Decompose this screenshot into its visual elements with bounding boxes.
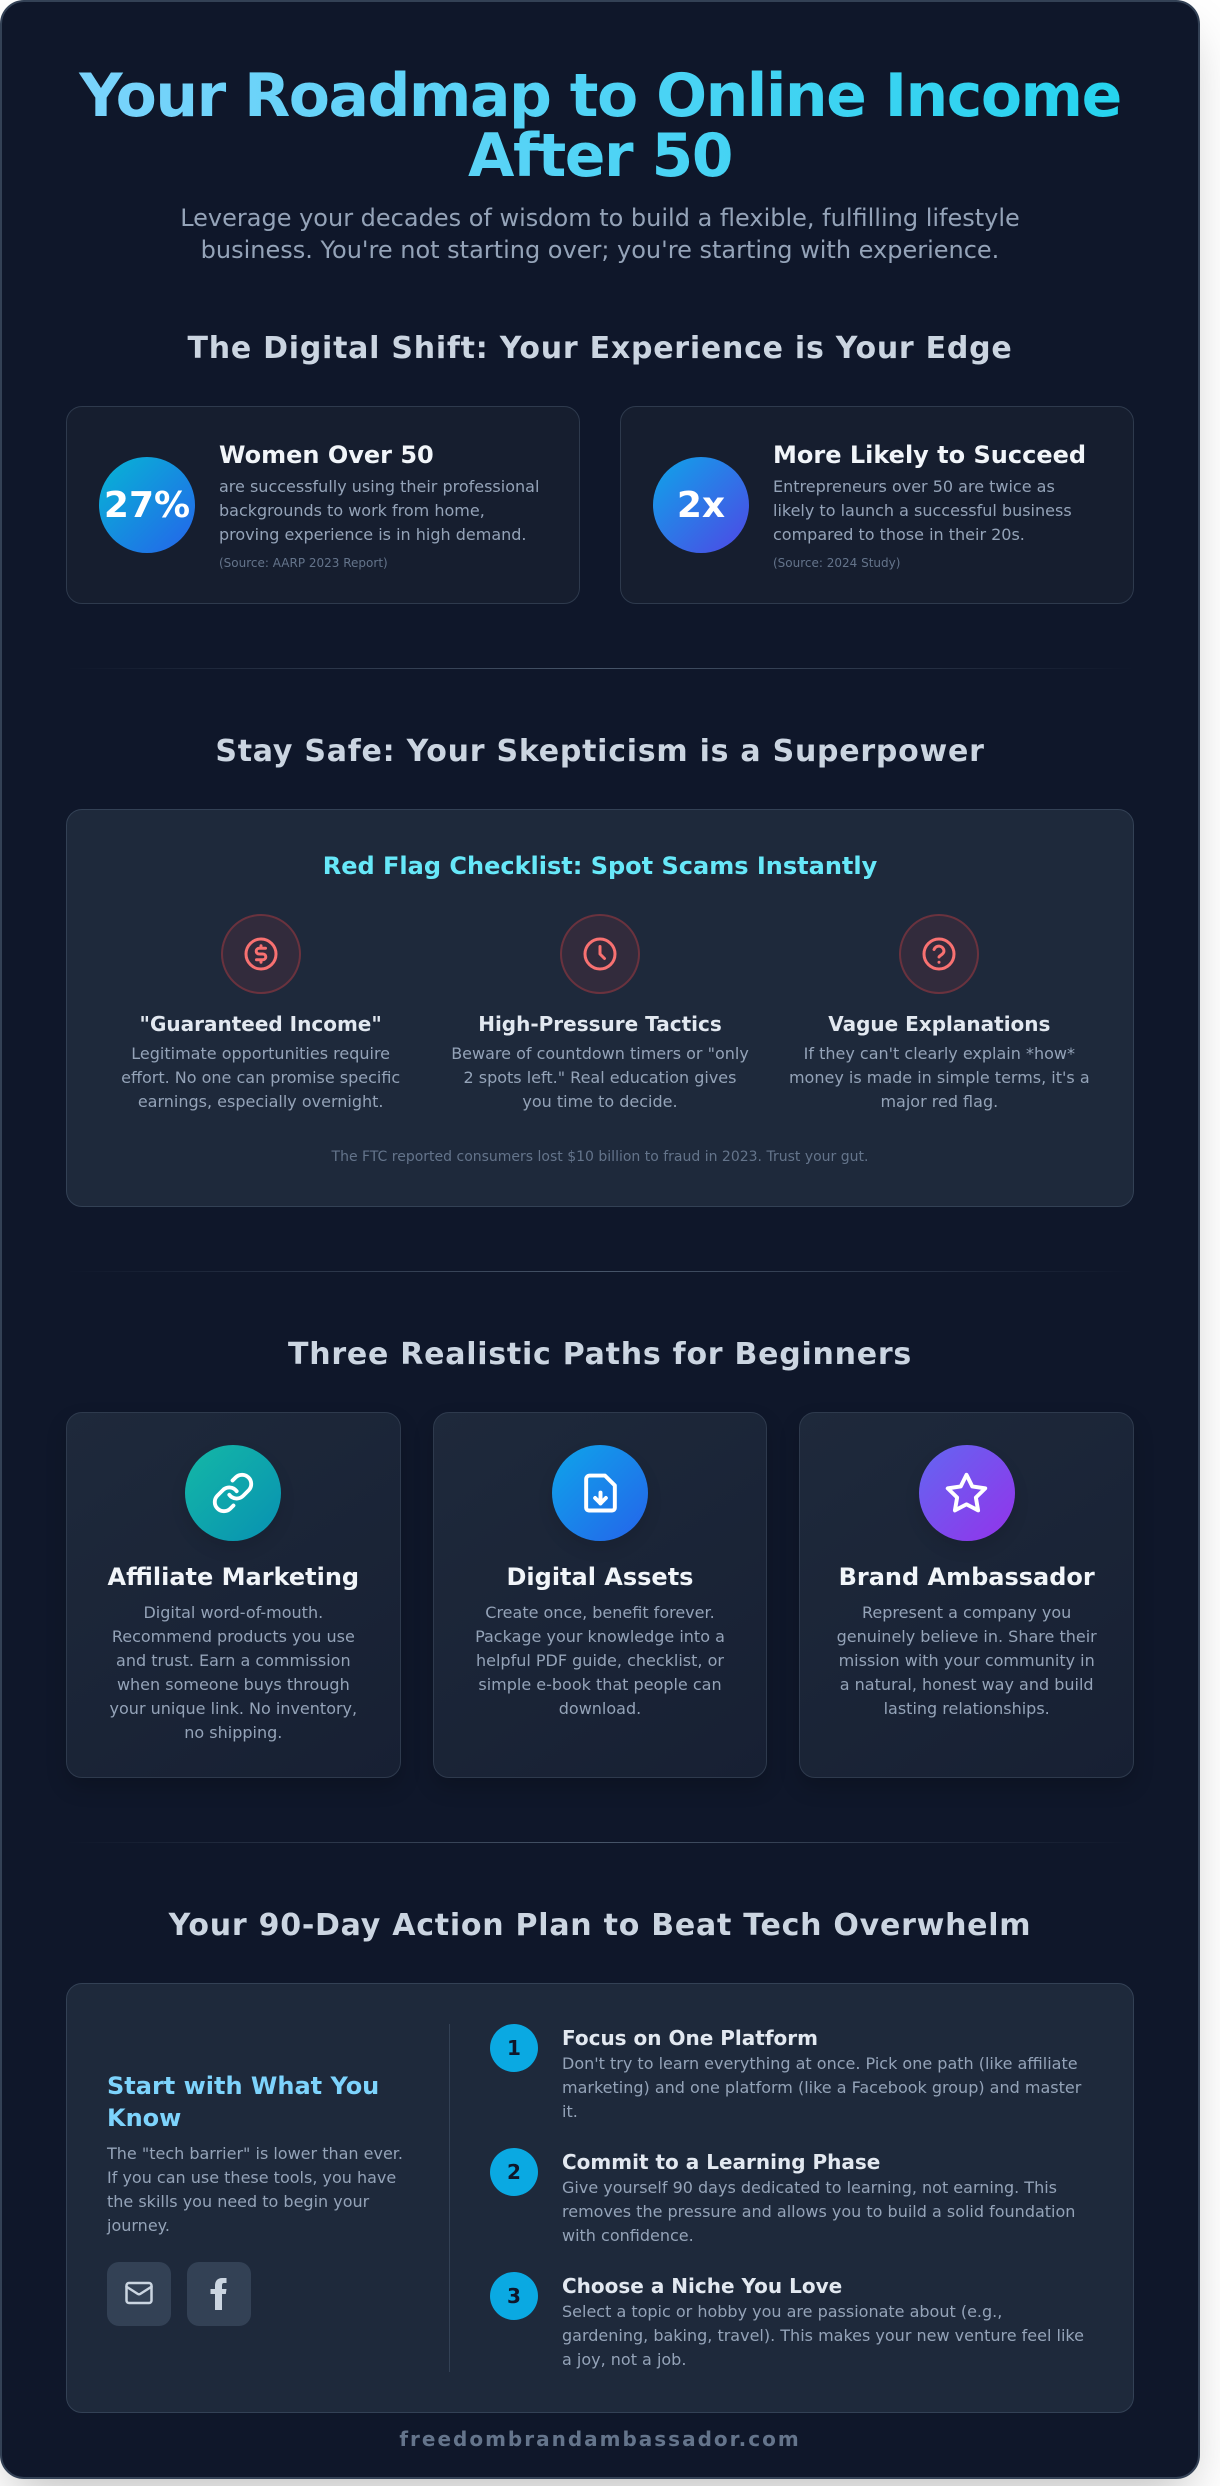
stat badge: 2x: 2x xyxy=(677,485,725,526)
step 1 text: Don't try to learn everything at once. Pick one path (like affiliate xyxy=(562,2054,1078,2073)
FTC note: The FTC reported consumers lost $10 billion to fraud in 2023. Trust your gut. xyxy=(332,1149,868,1165)
stat badge: 27% xyxy=(99,457,195,553)
step 3 text: gardening, baking, travel). This makes your new venture feel like xyxy=(562,2326,1084,2345)
panel: action plan xyxy=(66,1983,1134,2413)
red flag: vague explanations: Vague Explanations xyxy=(828,1012,1050,1036)
stat text: women over 50 xyxy=(219,441,539,570)
path text: brand ambassador: a natural, honest way and build xyxy=(840,1675,1094,1694)
stat text: more likely to succeed: (Source: 2024 Study) xyxy=(773,556,900,570)
panel: stat women over 50 xyxy=(66,406,580,604)
red flag: high-pressure tactics: you time to decide. xyxy=(522,1092,678,1111)
red flag: vague explanations: money is made in simple terms, it's a xyxy=(789,1068,1090,1087)
step 2 number: 2 xyxy=(507,2160,521,2184)
path text: affiliate marketing: when someone buys through xyxy=(117,1675,350,1694)
stat text: more likely to succeed xyxy=(773,441,1086,570)
red flag: guaranteed income: effort. No one can promise specific xyxy=(121,1068,400,1087)
icon: mail button xyxy=(107,2262,171,2326)
icon: link xyxy=(185,1445,281,1541)
panel: affiliate marketing xyxy=(66,1412,401,1778)
heading: stay safe: Stay Safe: Your Skepticism is a Superpower xyxy=(215,734,985,769)
step 2 text: with confidence. xyxy=(562,2226,694,2245)
left column text: Know xyxy=(107,2104,181,2132)
path text: affiliate marketing: and trust. Earn a commission xyxy=(116,1651,351,1670)
heading: three paths: Three Realistic Paths for Beginners xyxy=(288,1337,912,1372)
red flag: guaranteed income: earnings, especially overnight. xyxy=(138,1092,383,1111)
title: Your Roadmap to Online Income xyxy=(79,61,1121,131)
step 2 text xyxy=(562,2150,1075,2245)
heading: action plan: Your 90-Day Action Plan to Beat Tech Overwhelm xyxy=(169,1908,1031,1943)
step 1 text: marketing) and one platform (like a Facebook group) and master xyxy=(562,2078,1081,2097)
left column text: Start with What You xyxy=(107,2072,379,2100)
path text: affiliate marketing: your unique link. No inventory, xyxy=(110,1699,357,1718)
stat badge: 27%: 27% xyxy=(104,485,190,526)
path text: digital assets: helpful PDF guide, checklist, or xyxy=(476,1651,724,1670)
left column text xyxy=(106,2072,403,2235)
title xyxy=(40,66,1160,186)
heading: digital shift: The Digital Shift: Your Experience is Your Edge xyxy=(188,331,1012,366)
path text: digital assets: Digital Assets xyxy=(506,1563,693,1591)
path text: affiliate marketing: Recommend products you use xyxy=(112,1627,355,1646)
icon: facebook button xyxy=(187,2262,251,2326)
icon: question warning xyxy=(899,914,979,994)
step 2 text: removes the pressure and allows you to build a solid foundation xyxy=(562,2202,1075,2221)
left column text: journey. xyxy=(107,2216,170,2235)
left column text: The "tech barrier" is lower than ever. xyxy=(107,2144,403,2163)
path text: affiliate marketing xyxy=(108,1563,359,1742)
icon: star xyxy=(919,1445,1015,1541)
stat text: more likely to succeed: More Likely to Succeed xyxy=(773,441,1086,469)
red flag: vague explanations: If they can't clearly explain *how* xyxy=(804,1044,1075,1063)
stat text: women over 50: Women Over 50 xyxy=(219,441,434,469)
path text: digital assets: simple e-book that people can xyxy=(478,1675,722,1694)
red flag: high-pressure tactics: Beware of countdown timers or "only xyxy=(451,1044,749,1063)
step 1 text: Focus on One Platform xyxy=(562,2026,818,2050)
icon: clock warning xyxy=(560,914,640,994)
path text: brand ambassador: genuinely believe in. Share their xyxy=(837,1627,1097,1646)
stat text: more likely to succeed: likely to launch a successful business xyxy=(773,501,1072,520)
left column text: the skills you need to begin your xyxy=(107,2192,369,2211)
path text: brand ambassador: Represent a company you xyxy=(862,1603,1071,1622)
path text: brand ambassador: Brand Ambassador xyxy=(839,1563,1095,1591)
subtitle xyxy=(180,204,1020,264)
stat text: more likely to succeed: compared to those in their 20s. xyxy=(773,525,1025,544)
step 3 number: 3 xyxy=(507,2284,521,2308)
path text: digital assets xyxy=(475,1563,725,1718)
red flag: guaranteed income xyxy=(121,1012,400,1111)
path text: digital assets: Create once, benefit forever. xyxy=(485,1603,715,1622)
icon: file download xyxy=(552,1445,648,1541)
panel: stat more likely to succeed xyxy=(620,406,1134,604)
path text: affiliate marketing: Digital word-of-mouth. xyxy=(143,1603,323,1622)
icon: dollar warning xyxy=(221,914,301,994)
stat text: women over 50: proving experience is in high demand. xyxy=(219,525,527,544)
step 2 number xyxy=(490,2148,538,2196)
stat text: more likely to succeed: Entrepreneurs over 50 are twice as xyxy=(773,477,1055,496)
step 3 number xyxy=(490,2272,538,2320)
left column text: If you can use these tools, you have xyxy=(107,2168,396,2187)
red flag: high-pressure tactics: High-Pressure Tactics xyxy=(478,1012,722,1036)
step 1 text xyxy=(562,2026,1082,2121)
title: After 50 xyxy=(468,121,732,191)
path text: brand ambassador: mission with your community in xyxy=(839,1651,1095,1670)
stat text: women over 50: (Source: AARP 2023 Report) xyxy=(219,556,388,570)
stat text: women over 50: backgrounds to work from home, xyxy=(219,501,485,520)
step 3 text: Choose a Niche You Love xyxy=(562,2274,842,2298)
red flag: high-pressure tactics xyxy=(451,1012,749,1111)
panel: red flag checklist xyxy=(66,809,1134,1207)
path text: digital assets: download. xyxy=(559,1699,641,1718)
red flag: vague explanations xyxy=(789,1012,1090,1111)
panel: brand ambassador xyxy=(799,1412,1134,1778)
red flag: vague explanations: major red flag. xyxy=(880,1092,998,1111)
red flag: guaranteed income: Legitimate opportunities require xyxy=(131,1044,390,1063)
subtitle: business. You're not starting over; you're starting with experience. xyxy=(201,236,999,264)
panel: digital assets xyxy=(433,1412,767,1778)
step 3 text xyxy=(562,2274,1084,2369)
red flag: high-pressure tactics: 2 spots left." Real education gives xyxy=(463,1068,736,1087)
path text: brand ambassador: lasting relationships. xyxy=(884,1699,1050,1718)
stat badge: 2x xyxy=(653,457,749,553)
step 1 text: it. xyxy=(562,2102,578,2121)
step 2 text: Give yourself 90 days dedicated to learning, not earning. This xyxy=(562,2178,1057,2197)
subtitle: Leverage your decades of wisdom to build a flexible, fulfilling lifestyle xyxy=(180,204,1020,232)
path text: affiliate marketing: no shipping. xyxy=(184,1723,282,1742)
path text: digital assets: Package your knowledge into a xyxy=(475,1627,725,1646)
step 3 text: a joy, not a job. xyxy=(562,2350,686,2369)
step 3 text: Select a topic or hobby you are passionate about (e.g., xyxy=(562,2302,1002,2321)
path text: brand ambassador xyxy=(837,1563,1097,1718)
red flag title: Red Flag Checklist: Spot Scams Instantly xyxy=(323,852,877,880)
path text: affiliate marketing: Affiliate Marketing xyxy=(108,1563,359,1591)
step 1 number: 1 xyxy=(507,2036,521,2060)
step 1 number xyxy=(490,2024,538,2072)
step 2 text: Commit to a Learning Phase xyxy=(562,2150,880,2174)
stat text: women over 50: are successfully using their professional xyxy=(219,477,539,496)
red flag: guaranteed income: "Guaranteed Income" xyxy=(140,1012,382,1036)
footer url: freedombrandambassador.com xyxy=(399,2427,801,2451)
